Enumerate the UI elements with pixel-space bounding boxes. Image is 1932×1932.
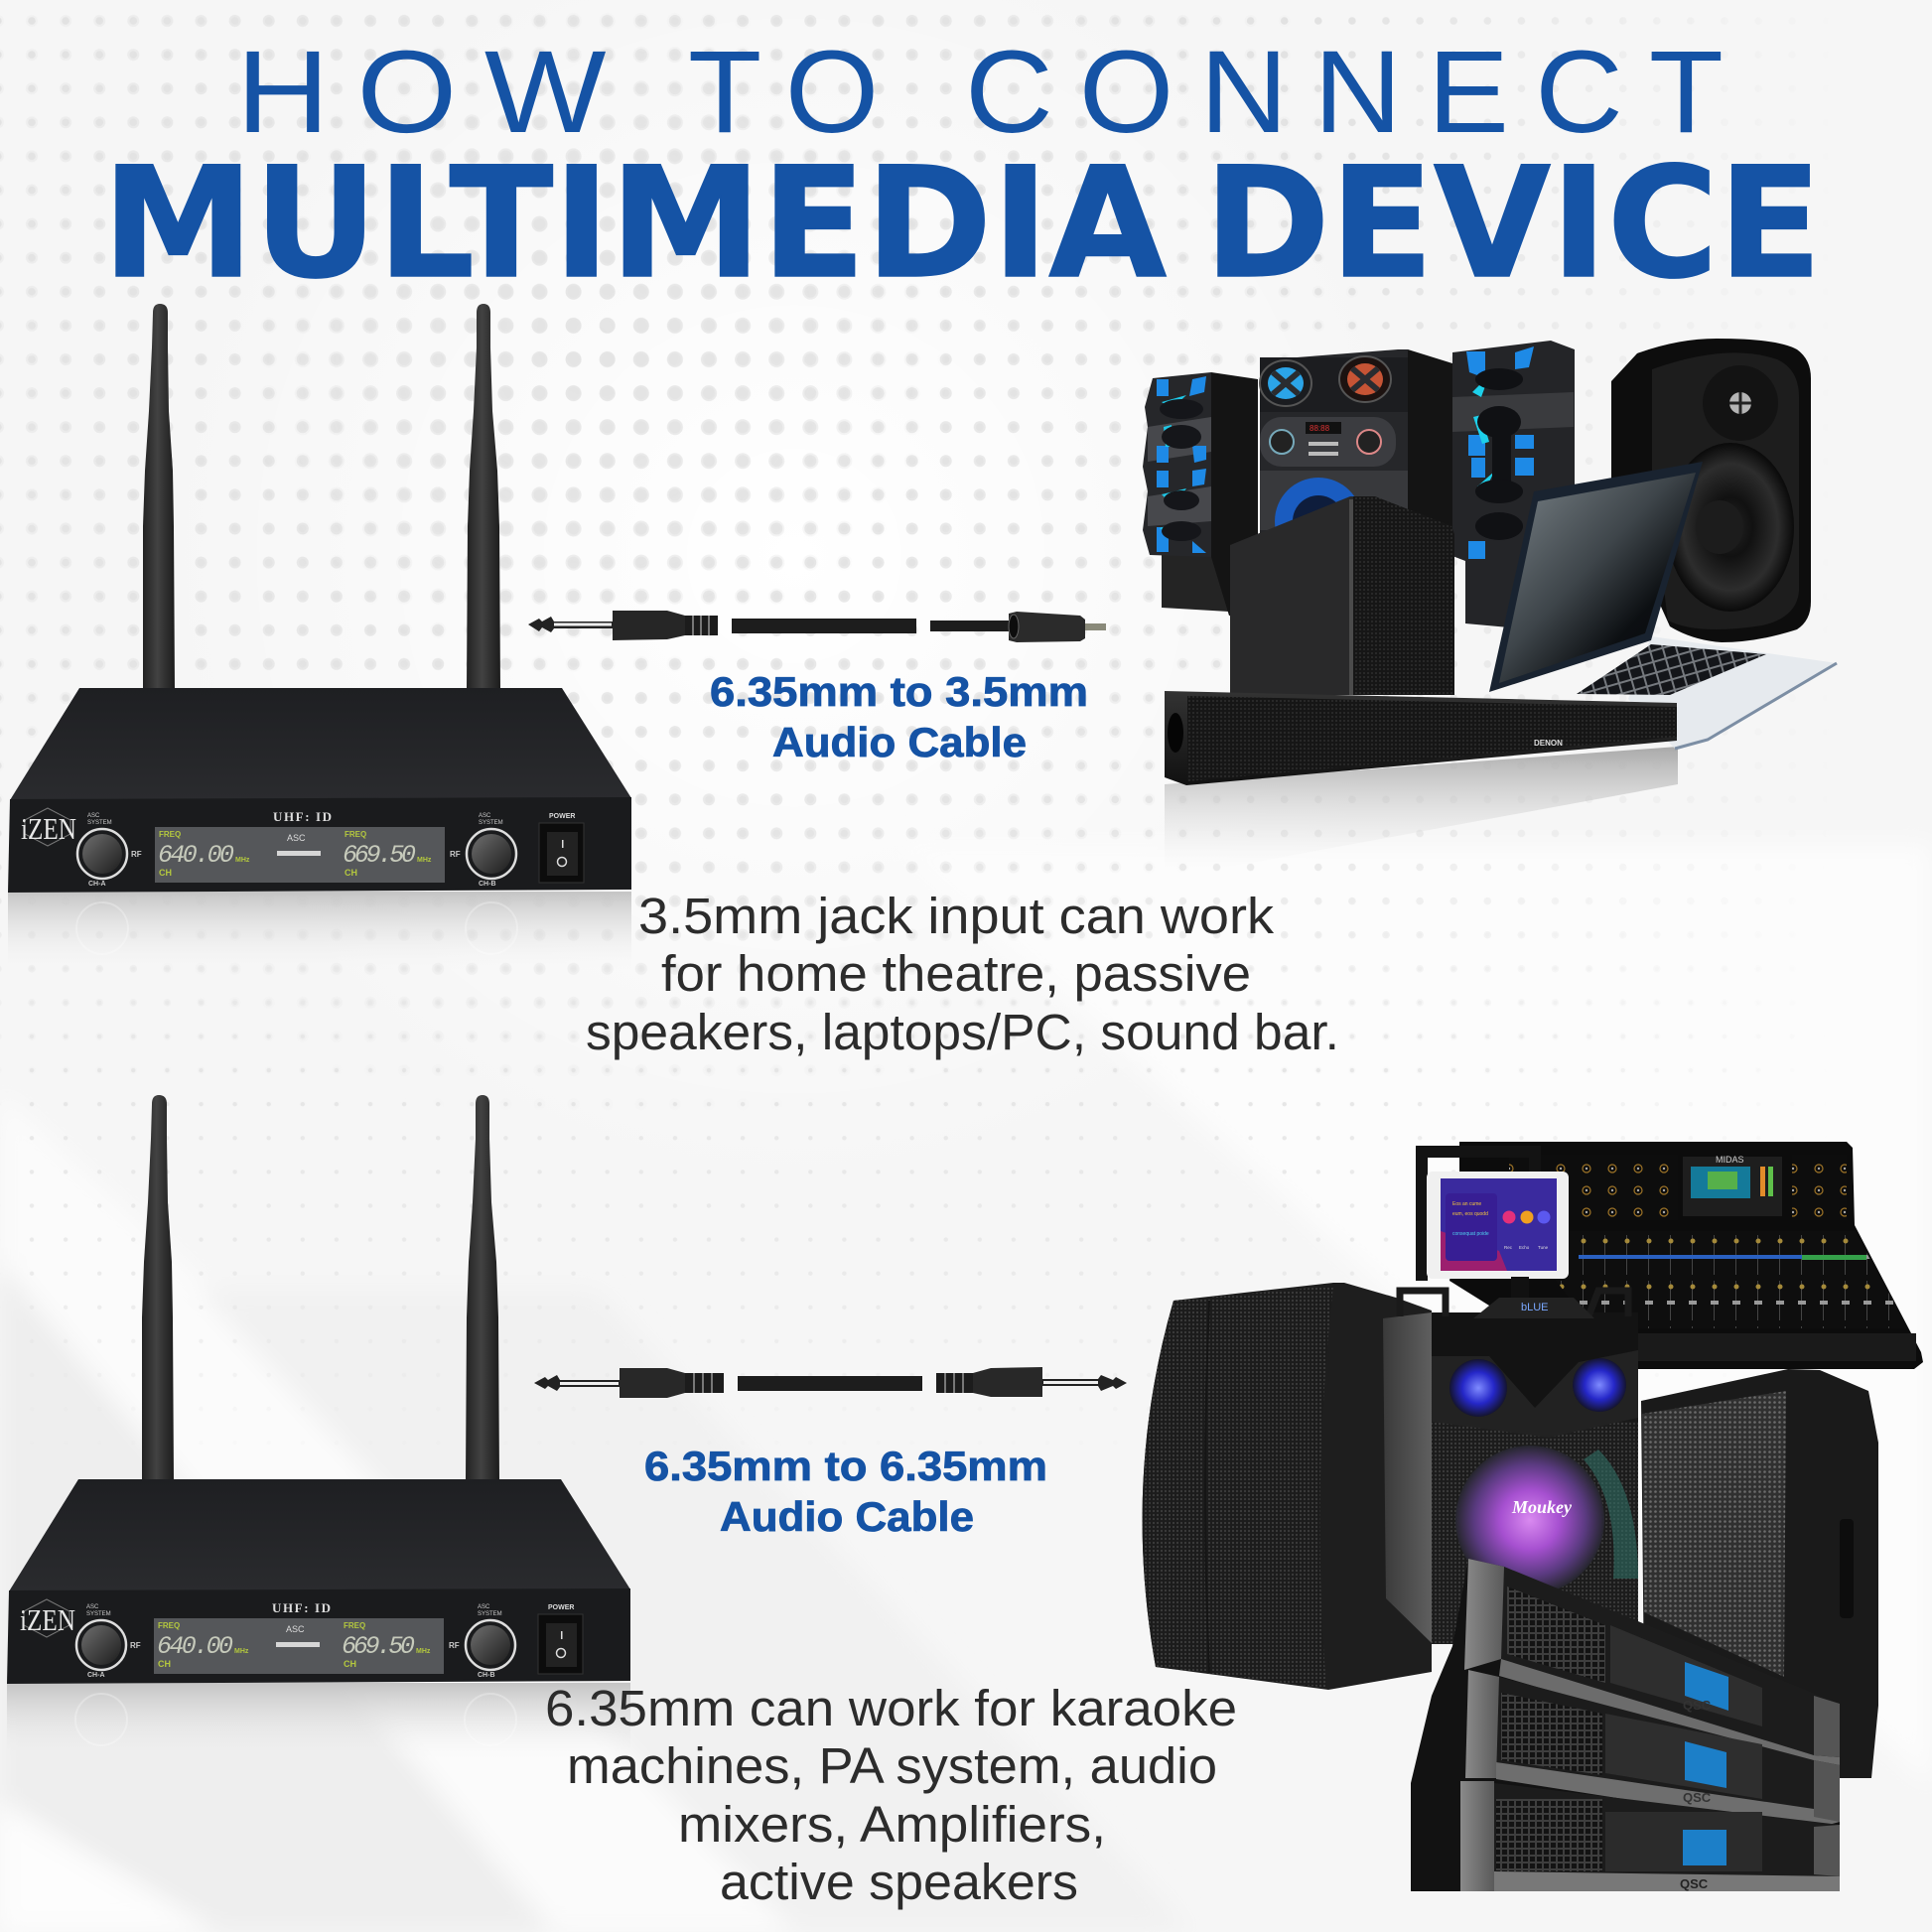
body text: 6.35mm: active speakers (720, 1854, 1078, 1910)
left knob: CH-A (87, 1672, 105, 1679)
karaoke speaker (1383, 1291, 1638, 1644)
label: audio cable: Audio Cable (772, 719, 1027, 765)
antenna right (466, 1095, 499, 1481)
left tower speaker (1143, 372, 1258, 616)
wall speaker left (1143, 1283, 1432, 1690)
right knob: RF (449, 1641, 460, 1650)
right knob: SYSTEM (479, 820, 503, 826)
body text: 6.35mm: machines, PA system, audio (567, 1737, 1217, 1794)
right knob: RF (450, 850, 461, 859)
power switch (538, 1604, 583, 1674)
model label: UHF: ID (272, 1600, 331, 1615)
antenna left (143, 304, 175, 690)
body text: 6.35mm: 6.35mm can work for karaoke (545, 1680, 1237, 1736)
centre tower speaker: 88:88 (1310, 424, 1330, 433)
lcd display: 640.00 (158, 841, 234, 870)
title: multimedia device: DEVICE (1204, 135, 1822, 313)
wall speaker (1611, 339, 1811, 642)
title: multimedia device (102, 135, 1822, 313)
lcd display: CH (158, 1659, 171, 1669)
lcd display: MHz (416, 1648, 431, 1655)
tablet: eum, eos quodd (1452, 1211, 1488, 1217)
title: how to connect: TO (688, 27, 904, 158)
amplifier middle (1465, 1670, 1840, 1829)
cable: 6.35mm to 6.35mm (534, 1367, 1127, 1398)
left knob: SYSTEM (87, 820, 112, 826)
karaoke speaker: Moukey (1511, 1497, 1573, 1517)
lcd display: ASC (287, 833, 306, 843)
tablet: Rec (1504, 1245, 1513, 1250)
tablet: Eos an cume (1452, 1201, 1481, 1207)
tablet: Tune (1538, 1245, 1549, 1250)
antenna right (467, 304, 500, 690)
lcd display: CH (159, 868, 172, 878)
title: how to connect: HOW (236, 27, 633, 158)
cable: 6.35mm to 3.5mm (528, 611, 1106, 642)
right knob: CH-B (479, 881, 496, 888)
receiver front panel (8, 797, 631, 893)
subwoofer box (1230, 496, 1454, 695)
left knob: RF (130, 1641, 141, 1650)
lcd display: FREQ (158, 1621, 180, 1630)
label: 6.35mm to 6.35mm: 6.35mm to 6.35mm (644, 1443, 1047, 1489)
reflection (7, 1683, 630, 1760)
body text: 6.35mm (545, 1680, 1237, 1910)
receiver top surface (9, 1479, 630, 1591)
body text: 3.5mm jack (586, 888, 1339, 1060)
title: how to connect: CONNECT (965, 27, 1749, 158)
body text: 3.5mm jack: for home theatre, passive (661, 945, 1251, 1002)
power switch (539, 813, 584, 883)
lcd display: CH (344, 1659, 356, 1669)
left knob (76, 1604, 141, 1679)
label: 6.35mm to 3.5mm: 6.35mm to 3.5mm (710, 668, 1088, 715)
power switch: POWER (548, 1604, 574, 1611)
amplifier bottom (1460, 1781, 1840, 1891)
amplifier top (1464, 1559, 1840, 1767)
left knob: ASC (87, 813, 100, 819)
lcd display: MHz (235, 857, 250, 864)
karaoke speaker: bLUE (1521, 1302, 1549, 1313)
right knob: CH-B (478, 1672, 494, 1679)
devices group: PA and karaoke (1143, 1142, 1923, 1891)
sound bar (1165, 691, 1677, 785)
receiver top surface (10, 688, 631, 800)
tablet: consequat poide (1452, 1231, 1489, 1237)
lcd display: FREQ (344, 1621, 365, 1630)
lcd display: FREQ (159, 830, 181, 839)
lcd display: 669.50 (343, 841, 416, 870)
power switch: POWER (549, 813, 575, 820)
amplifier top: QSC (1683, 1698, 1712, 1713)
left knob (77, 813, 142, 888)
lcd display: ASC (286, 1624, 305, 1634)
amplifier bottom: QSC (1680, 1876, 1709, 1891)
wireless receiver top (8, 304, 631, 969)
lcd display (155, 827, 445, 883)
lcd display: 669.50 (342, 1632, 415, 1661)
logo: iZEN (21, 811, 76, 846)
body text: 3.5mm jack: speakers, laptops/PC, sound bar. (586, 1004, 1339, 1060)
amplifier backing (1411, 1559, 1840, 1891)
lcd display: FREQ (345, 830, 366, 839)
background (0, 15, 1626, 1446)
right tower speaker (1452, 341, 1575, 627)
lcd display: MHz (417, 857, 432, 864)
body text: 6.35mm: mixers, Amplifiers, (678, 1796, 1106, 1853)
antenna left (142, 1095, 174, 1481)
left knob: ASC (86, 1604, 99, 1610)
lcd display: MHz (234, 1648, 249, 1655)
centre tower speaker (1260, 349, 1452, 625)
bar reflection (1165, 747, 1678, 874)
laptop (1489, 462, 1837, 749)
karaoke handle (1422, 1152, 1535, 1281)
label: audio cable: Audio Cable (720, 1493, 974, 1540)
left knob: SYSTEM (86, 1611, 111, 1617)
right knob: ASC (479, 813, 491, 819)
audio mixer (1449, 1142, 1923, 1369)
audio mixer: MIDAS (1716, 1155, 1744, 1165)
reflection (8, 892, 631, 969)
right knob (449, 1604, 515, 1679)
sound bar: DENON (1534, 739, 1563, 748)
receiver front panel (7, 1588, 630, 1684)
amplifier middle: QSC (1683, 1790, 1712, 1805)
tablet: Echo (1519, 1245, 1530, 1250)
right knob: ASC (478, 1604, 490, 1610)
title: how to connect (236, 27, 1749, 158)
title: multimedia device: MULTIMEDIA (102, 135, 1167, 313)
right knob: SYSTEM (478, 1611, 502, 1617)
left knob: RF (131, 850, 142, 859)
logo: iZEN (20, 1602, 75, 1637)
lcd display: CH (345, 868, 357, 878)
model label: UHF: ID (273, 809, 332, 824)
right knob (450, 813, 516, 888)
tablet mount (1511, 1277, 1529, 1303)
body text: 3.5mm jack: 3.5mm jack input can work (638, 888, 1275, 944)
tablet (1427, 1172, 1569, 1279)
left knob: CH-A (88, 881, 105, 888)
lcd display: 640.00 (157, 1632, 233, 1661)
wireless receiver bottom (7, 1095, 630, 1760)
devices group: home audio (1143, 339, 1837, 874)
passive speaker right (1641, 1369, 1878, 1778)
lcd display (154, 1618, 444, 1674)
